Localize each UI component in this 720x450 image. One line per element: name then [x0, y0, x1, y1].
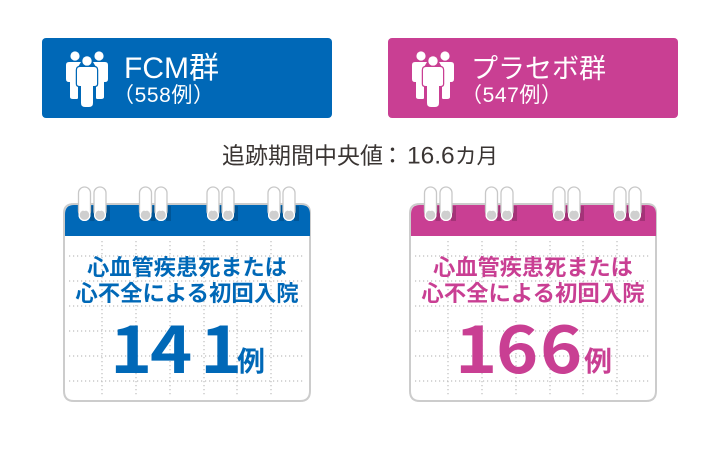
- panel: FCM group header: [42, 38, 332, 118]
- icon: people group (placebo): [412, 51, 454, 107]
- text: median follow-up: カ月: [455, 144, 498, 168]
- text: median follow-up: 16.6: [407, 142, 455, 170]
- number: FCM events: 1: [200, 299, 242, 392]
- number: FCM events: 1: [110, 299, 152, 392]
- panel: placebo group header: [388, 38, 678, 118]
- icon: people group (FCM): [66, 51, 108, 107]
- panel: FCM calendar: [64, 187, 310, 401]
- text: placebo case count: （547例）: [461, 84, 563, 107]
- text: FCM unit: 例: [237, 346, 265, 377]
- number: placebo events: 1: [455, 299, 497, 392]
- number: placebo events: [455, 299, 582, 392]
- heading: FCM group: FCM群: [124, 52, 219, 85]
- text: FCM case count: （558例）: [113, 84, 215, 107]
- text: placebo outcome label: 心血管疾患死または: [433, 255, 633, 280]
- heading: placebo group: プラセボ群: [471, 54, 606, 84]
- text: median follow-up: 追跡期間中央値: [222, 142, 383, 168]
- number: placebo events: 6: [496, 299, 538, 392]
- text: median follow-up: ：: [381, 142, 404, 168]
- number: FCM events: 4: [150, 299, 192, 392]
- panel: FCM calendar: 心不全による初回入院: [75, 281, 299, 306]
- number: placebo events: 6: [540, 299, 582, 392]
- panel: placebo calendar: [410, 187, 656, 401]
- text: placebo unit: 例: [584, 346, 612, 377]
- text: FCM outcome label: 心血管疾患死または: [87, 255, 287, 280]
- panel: placebo calendar: 心不全による初回入院: [421, 281, 645, 306]
- number: FCM events: [110, 299, 242, 392]
